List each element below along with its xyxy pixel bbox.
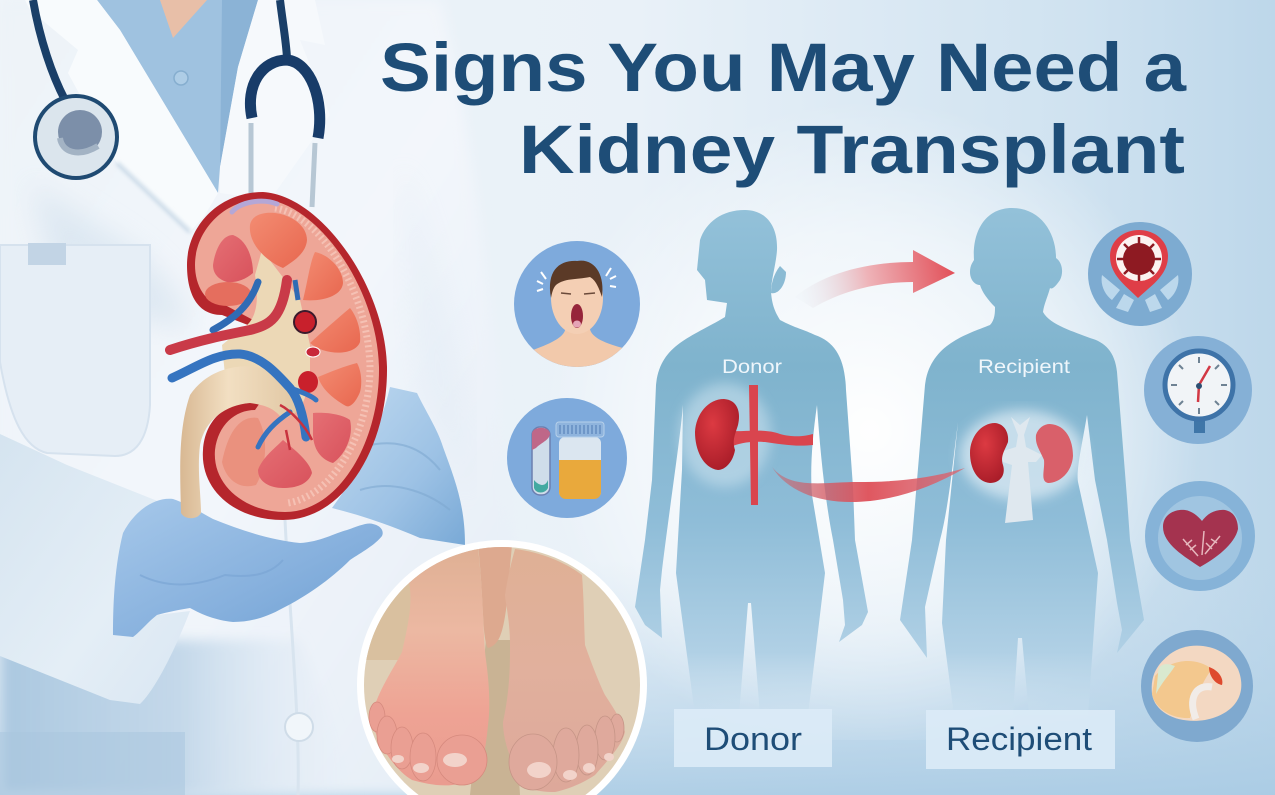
title [380, 29, 1187, 188]
left foot [372, 548, 489, 785]
dark calyces [294, 311, 316, 333]
lapels [25, 0, 218, 232]
ureter [180, 366, 300, 518]
icon: fatigue face [514, 241, 640, 380]
beige pelvis [222, 250, 310, 410]
veins [213, 282, 258, 330]
icon: blood pressure gauge [1144, 336, 1252, 444]
right foot [503, 549, 625, 792]
label: recipient [926, 710, 1115, 769]
icon: donor kidney and vessels [679, 383, 813, 505]
label: donor: Donor [704, 721, 802, 757]
icon: recipient kidneys [960, 410, 1084, 523]
figure: recipient silhouette [900, 208, 1144, 715]
toes left [369, 702, 487, 785]
coat shading [30, 180, 190, 330]
figure: donor silhouette [635, 210, 868, 715]
ear [771, 266, 786, 293]
icon: kidney cross-section [170, 192, 387, 520]
label: donor [674, 709, 832, 767]
title: Signs You May Need a [380, 29, 1187, 106]
pocket [0, 245, 150, 456]
title: Kidney Transplant [519, 111, 1185, 188]
neck skin [160, 0, 207, 38]
toes right [509, 714, 624, 790]
renal artery [170, 280, 287, 350]
photo: swollen feet [357, 540, 650, 795]
icon: urine sample [507, 398, 627, 518]
arrow: lower transfer curve [772, 467, 965, 502]
medulla lobes [250, 213, 307, 268]
shirt collar button [174, 71, 188, 85]
icon: gloved hands [113, 387, 465, 637]
icon: cracked heart [1145, 481, 1255, 591]
lower pocket [0, 732, 185, 795]
lower inner lobe [222, 418, 265, 486]
cortex [195, 199, 379, 512]
toenails [392, 753, 614, 780]
icon: stethoscope [33, 0, 320, 207]
label: recipient: Recipient [946, 721, 1092, 757]
back foot [478, 545, 512, 648]
arrow: donor to recipient top [795, 250, 955, 308]
coat seam lines [285, 520, 298, 795]
coat button [285, 713, 313, 741]
icon: infection pin [1088, 222, 1192, 326]
icon: abstract organ [1141, 630, 1253, 742]
figure: donor silhouette: Donor [722, 357, 783, 378]
coat sleeve [0, 434, 190, 704]
shirt [97, 0, 258, 193]
panel: doctor in white coat [0, 0, 520, 795]
figure: recipient silhouette: Recipient [978, 357, 1071, 378]
capsule highlight [232, 201, 277, 212]
